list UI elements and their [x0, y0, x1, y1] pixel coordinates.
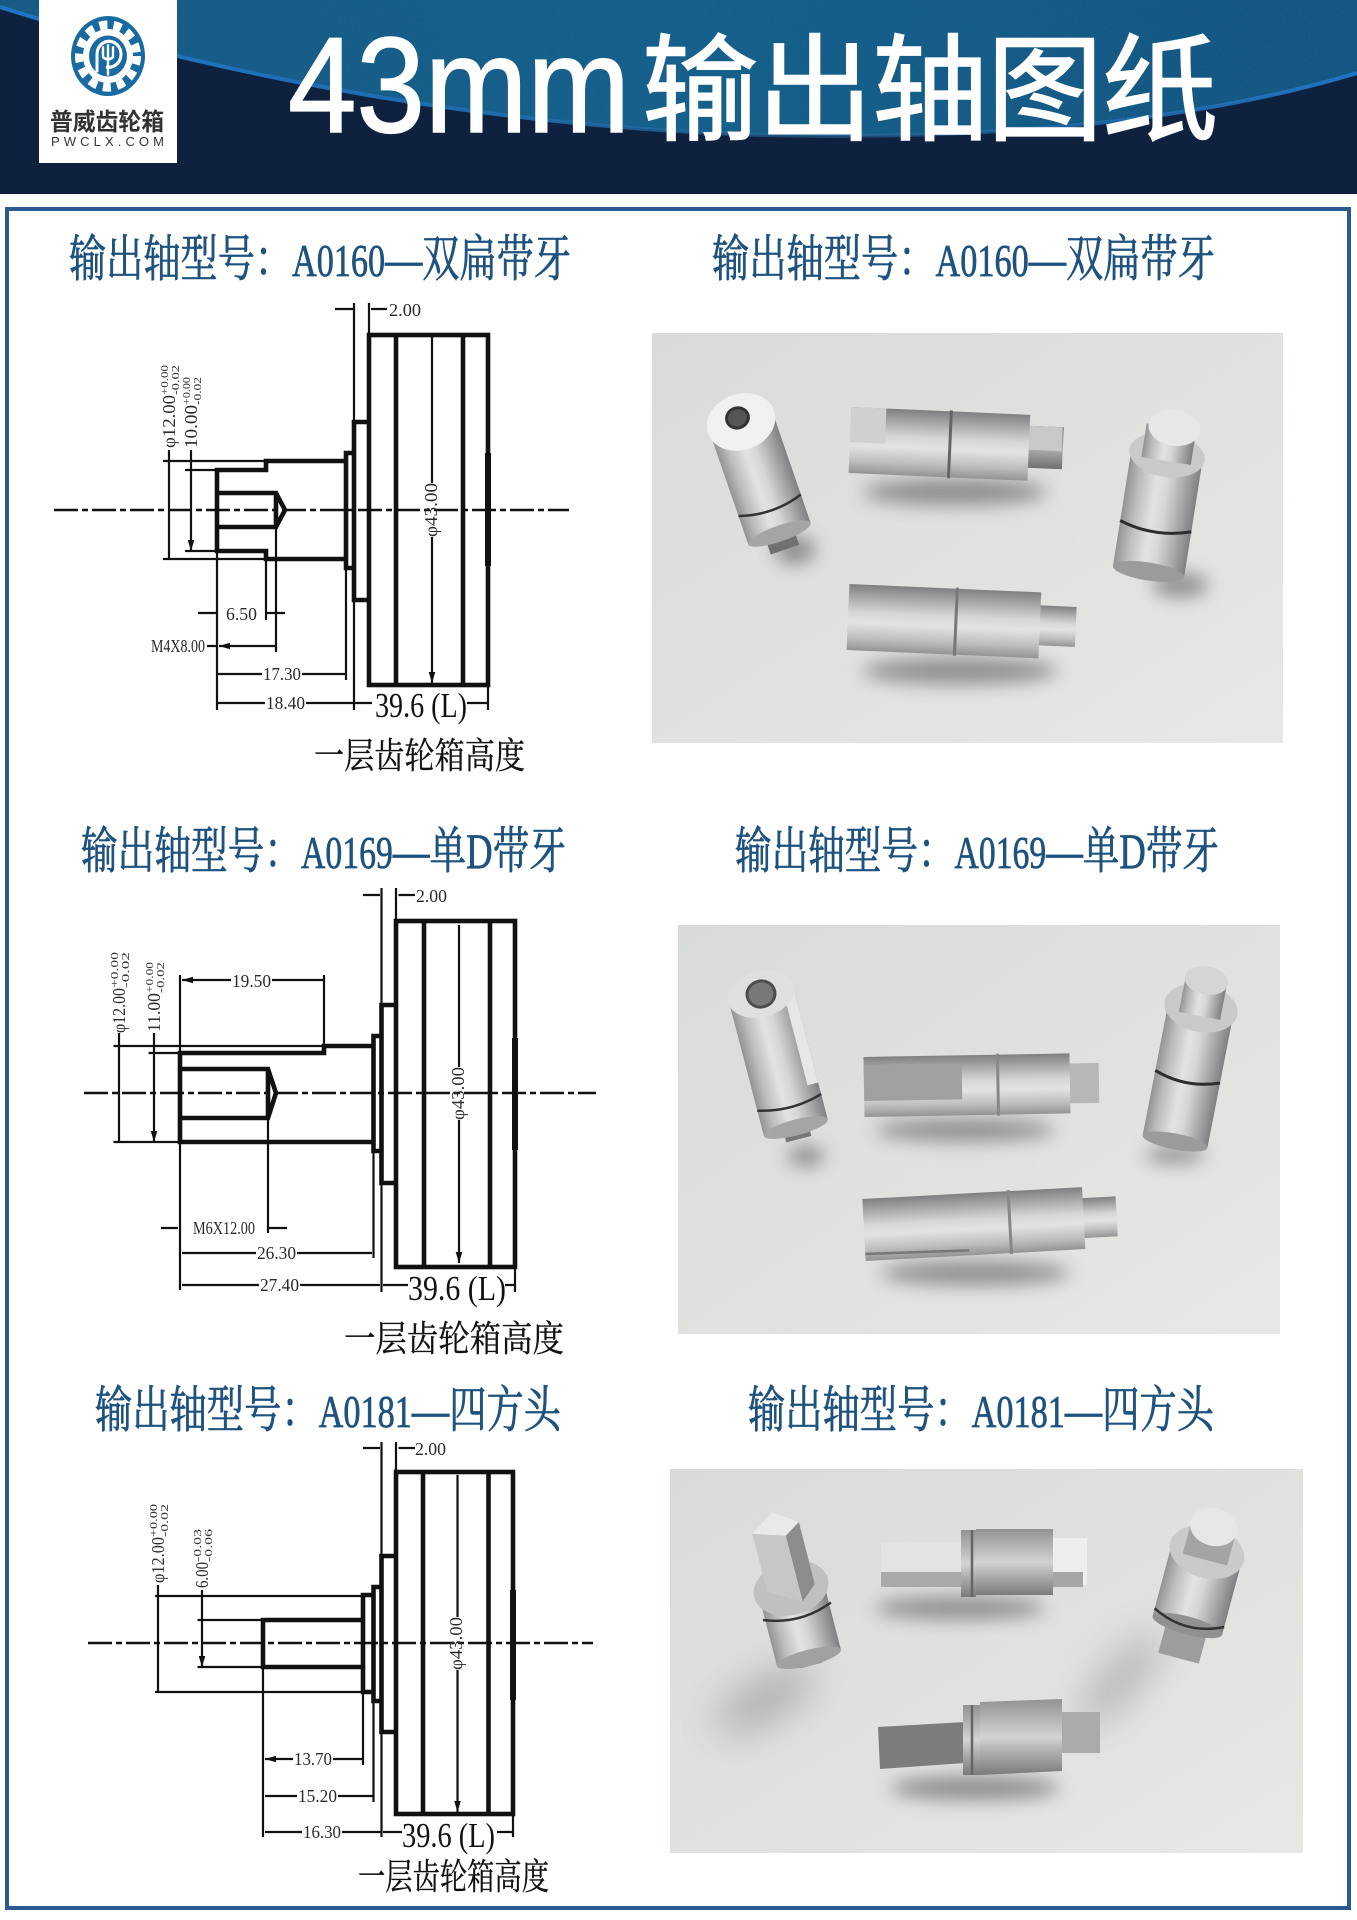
shaft: bottom horizontal with square	[878, 1699, 1100, 1775]
dimension labels: 27.40	[260, 1275, 299, 1295]
dimension labels: M4X8.00	[151, 636, 205, 656]
shaft: bottom horizontal	[847, 583, 1077, 661]
dimension labels: 11.00	[144, 993, 164, 1032]
drawing: A0160 technical drawing	[54, 300, 569, 776]
dimension labels: 19.50	[232, 971, 271, 991]
shaft: top horizontal	[849, 406, 1064, 483]
dimension labels: 一层齿轮箱高度	[358, 1857, 549, 1897]
heading: A0181 left: 输出轴型号：A0181—四方头	[95, 1382, 562, 1438]
dimension labels: 39.6 (L)	[408, 1269, 506, 1308]
dimension labels: 13.70	[294, 1749, 332, 1769]
photo: A0181 shafts	[670, 1469, 1303, 1853]
dimension labels: -0.06	[203, 1528, 215, 1562]
dimension labels: 一层齿轮箱高度	[344, 1319, 564, 1359]
title: 43mm	[288, 9, 630, 161]
dimension labels: φ12.00	[109, 988, 129, 1033]
dimension labels: 16.30	[303, 1822, 341, 1842]
shaft: upright left with square	[752, 1512, 841, 1669]
dimension labels: φ12.00	[159, 395, 179, 448]
dimension labels: 10.00	[181, 405, 201, 448]
shaft: bottom horizontal	[862, 1184, 1118, 1262]
dimension labels: -0.02	[120, 952, 132, 988]
dimension labels: 26.30	[257, 1243, 296, 1263]
logo	[39, 0, 177, 163]
shadows	[788, 1119, 1205, 1285]
dimension labels: 6.50	[226, 604, 257, 624]
title: 输出轴图纸	[642, 26, 1218, 156]
dimension labels: +0.00	[109, 951, 121, 988]
dimension labels: 15.20	[298, 1786, 337, 1806]
header banner	[0, 0, 1357, 194]
dimension labels: φ43.00	[448, 1067, 468, 1120]
photo: A0169 shafts	[678, 925, 1280, 1334]
heading: A0169 right: 输出轴型号：A0169—单D带牙	[735, 823, 1219, 879]
shaft: upright left	[706, 393, 811, 554]
dimension labels: -0.03	[192, 1528, 204, 1562]
heading: A0169 left: 输出轴型号：A0169—单D带牙	[81, 823, 566, 879]
dimension labels: φ43.00	[446, 1617, 466, 1670]
dimension labels: φ12.00	[148, 1537, 168, 1583]
dimension labels	[148, 1439, 549, 1897]
logo name: 普威齿轮箱	[50, 109, 164, 136]
dimension labels: φ43.00	[421, 483, 441, 537]
heading: A0181 right: 输出轴型号：A0181—四方头	[748, 1382, 1215, 1438]
dimension labels: -0.02	[159, 1504, 171, 1537]
dimension labels: 17.30	[263, 664, 301, 684]
dimension labels: +0.00	[181, 376, 193, 405]
shadows	[708, 1625, 1169, 1743]
dimension labels: M6X12.00	[193, 1218, 255, 1238]
shaft: top horizontal with square	[881, 1529, 1087, 1597]
dimension labels: -0.02	[155, 962, 167, 993]
title	[288, 9, 1218, 161]
icon: gear logo	[71, 16, 145, 96]
shaft: right upright	[1152, 1526, 1244, 1664]
dimension labels: 2.00	[389, 300, 421, 320]
dimension labels: 39.6 (L)	[375, 686, 467, 725]
shaft: right upright	[1142, 966, 1238, 1152]
dimension labels: 2.00	[416, 886, 447, 906]
heading: A0160 left: 输出轴型号：A0160—双扁带牙	[69, 231, 571, 287]
heading: A0160 right: 输出轴型号：A0160—双扁带牙	[712, 231, 1215, 287]
dimension labels: -0.02	[170, 365, 182, 395]
drawing: A0169 technical drawing	[84, 886, 596, 1359]
dimension labels: 6.00	[192, 1562, 212, 1588]
shaft: upright left	[730, 979, 828, 1142]
drawing: A0181 technical drawing	[88, 1439, 593, 1897]
dimension labels: +0.00	[144, 961, 156, 993]
shaft: top horizontal	[863, 1052, 1100, 1118]
photo: A0160 shafts	[652, 333, 1283, 743]
dimension labels	[151, 300, 525, 776]
dimension labels: 39.6 (L)	[402, 1816, 495, 1855]
shadows	[775, 479, 1208, 684]
dimension labels: 18.40	[266, 693, 305, 713]
shaft: right upright	[1113, 410, 1205, 582]
dimension labels: +0.00	[159, 364, 171, 395]
dimension labels	[109, 886, 564, 1359]
dimension labels: 2.00	[415, 1439, 446, 1459]
dimension labels: +0.00	[148, 1503, 160, 1537]
dimension labels: -0.02	[192, 377, 204, 405]
dimension labels: 一层齿轮箱高度	[314, 736, 525, 776]
logo url: PWCLX.COM	[51, 134, 164, 149]
